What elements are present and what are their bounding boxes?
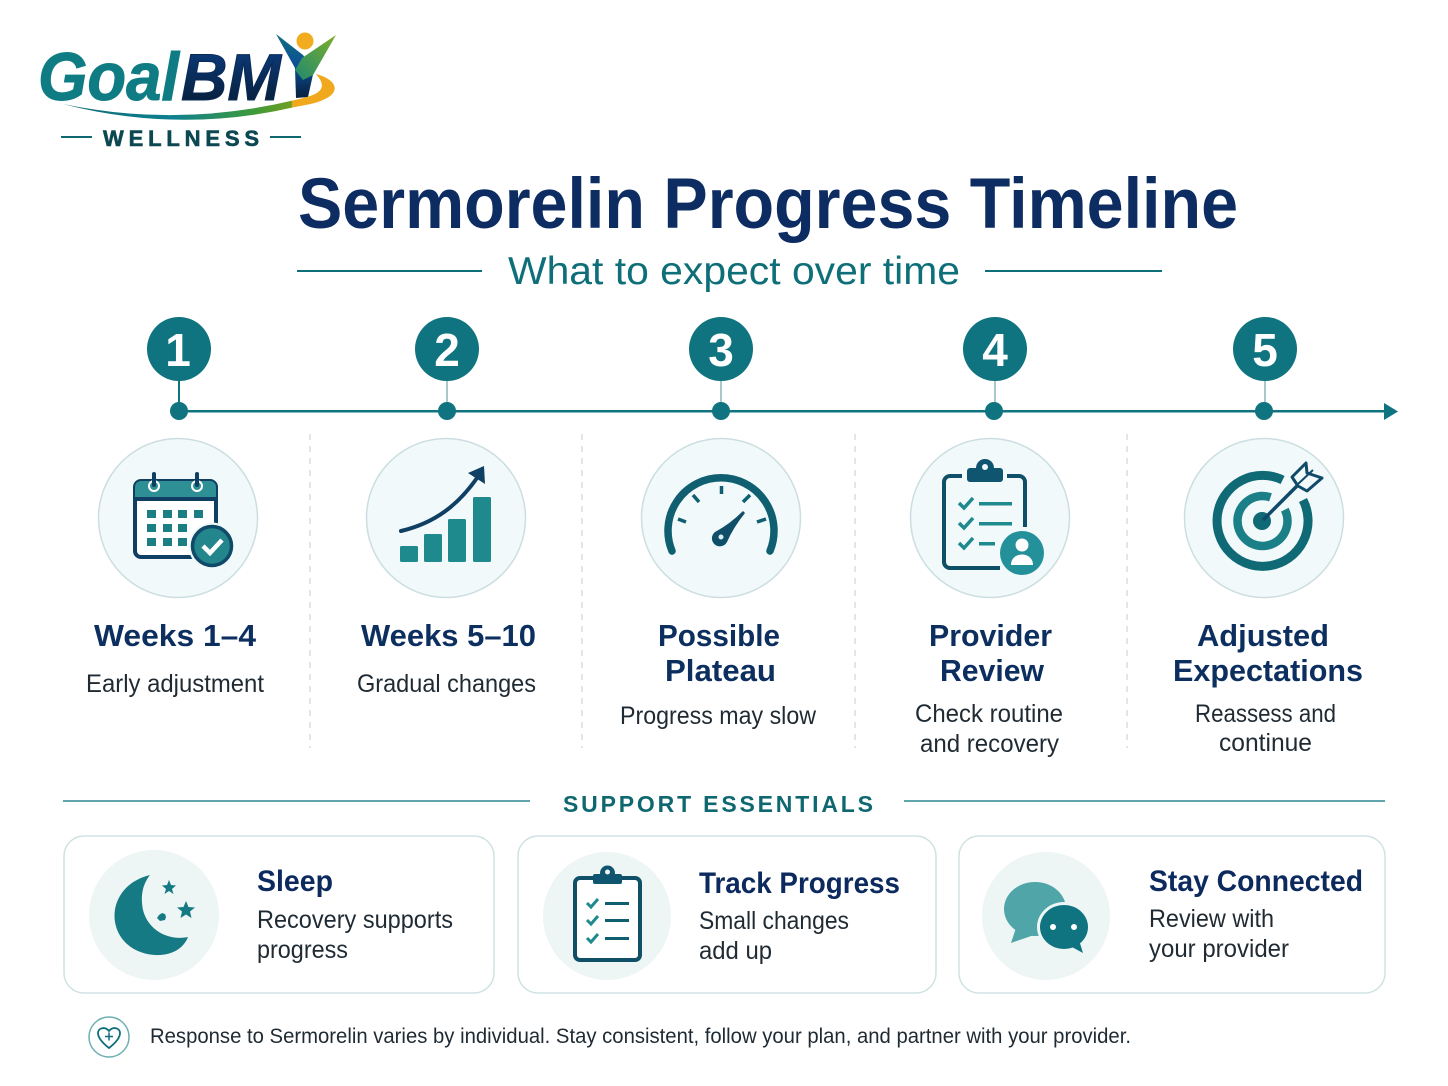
step 4 text: and recovery [920,730,1059,758]
step 3 text: Progress may slow [620,702,817,730]
icon: moon and stars [89,850,219,980]
panel: stay connected: Review with [1149,905,1274,933]
panel: track progress [518,836,936,993]
step 5 text: continue [1219,729,1312,757]
step 2 text [357,618,536,698]
icon: speedometer [642,438,800,598]
step 2 text: Gradual changes [357,670,536,698]
step 2 text: Weeks 5–10 [361,618,536,653]
step 4 text: Check routine [915,700,1063,728]
panel: sleep: Recovery supports [257,906,453,934]
step 1 marker: 1 [165,324,191,376]
icon: calendar [98,438,258,598]
step 5 text: Reassess and [1195,700,1336,728]
section heading: support essentials: SUPPORT ESSENTIALS [563,791,873,817]
subtitle: What to expect over time [508,250,960,293]
step 4 marker: 4 [982,324,1008,376]
step 1 text: Weeks 1–4 [94,618,257,653]
icon: chat bubbles [982,852,1110,980]
panel: sleep: Sleep [257,865,333,898]
panel: stay connected: Stay Connected [1149,865,1363,898]
step 5 text: Expectations [1173,653,1363,688]
step 5 text [1173,618,1363,757]
step 1 marker [147,317,211,420]
panel: sleep [64,836,494,993]
panel: track progress: Small changes [699,907,849,935]
icon: rising bar chart [366,438,526,598]
step 5 marker: 5 [1252,324,1278,376]
icon: target with arrow [1184,438,1344,598]
step 5 marker [1233,317,1297,420]
step 3 text: Possible [658,618,780,653]
step 3 text [620,618,817,730]
panel: sleep: progress [257,936,348,964]
step 1 text [86,618,264,698]
step 3 marker: 3 [708,324,734,376]
step 1 text: Early adjustment [86,670,264,698]
icon: heart with plus [89,1017,129,1057]
step 4 text [915,618,1063,758]
step 4 text: Review [940,653,1045,688]
logo: GoalBMI Wellness: WELLNESS [103,126,259,151]
icon: clipboard checklist [543,852,671,980]
panel: track progress: add up [699,937,772,965]
icon: clipboard with person [910,438,1070,598]
step 4 marker [963,317,1027,420]
panel: stay connected [959,836,1385,993]
panel: stay connected: your provider [1149,935,1289,963]
logo: GoalBMI Wellness: Goal [38,39,181,115]
step 4 text: Provider [929,618,1052,653]
step 2 marker: 2 [434,324,460,376]
footer note: Response to Sermorelin varies by individual. Stay consistent, follow your plan, and partner with your provider. [150,1025,1131,1048]
timeline axis with arrow [179,403,1398,420]
step 3 marker [689,317,753,420]
logo: GoalBMI Wellness: BM [181,40,283,114]
step 3 text: Plateau [665,653,776,688]
step 2 marker [415,317,479,420]
panel: track progress: Track Progress [699,867,900,900]
title: Sermorelin Progress Timeline [298,165,1238,244]
logo: GoalBMI Wellness [38,32,336,151]
step 5 text: Adjusted [1197,618,1329,653]
